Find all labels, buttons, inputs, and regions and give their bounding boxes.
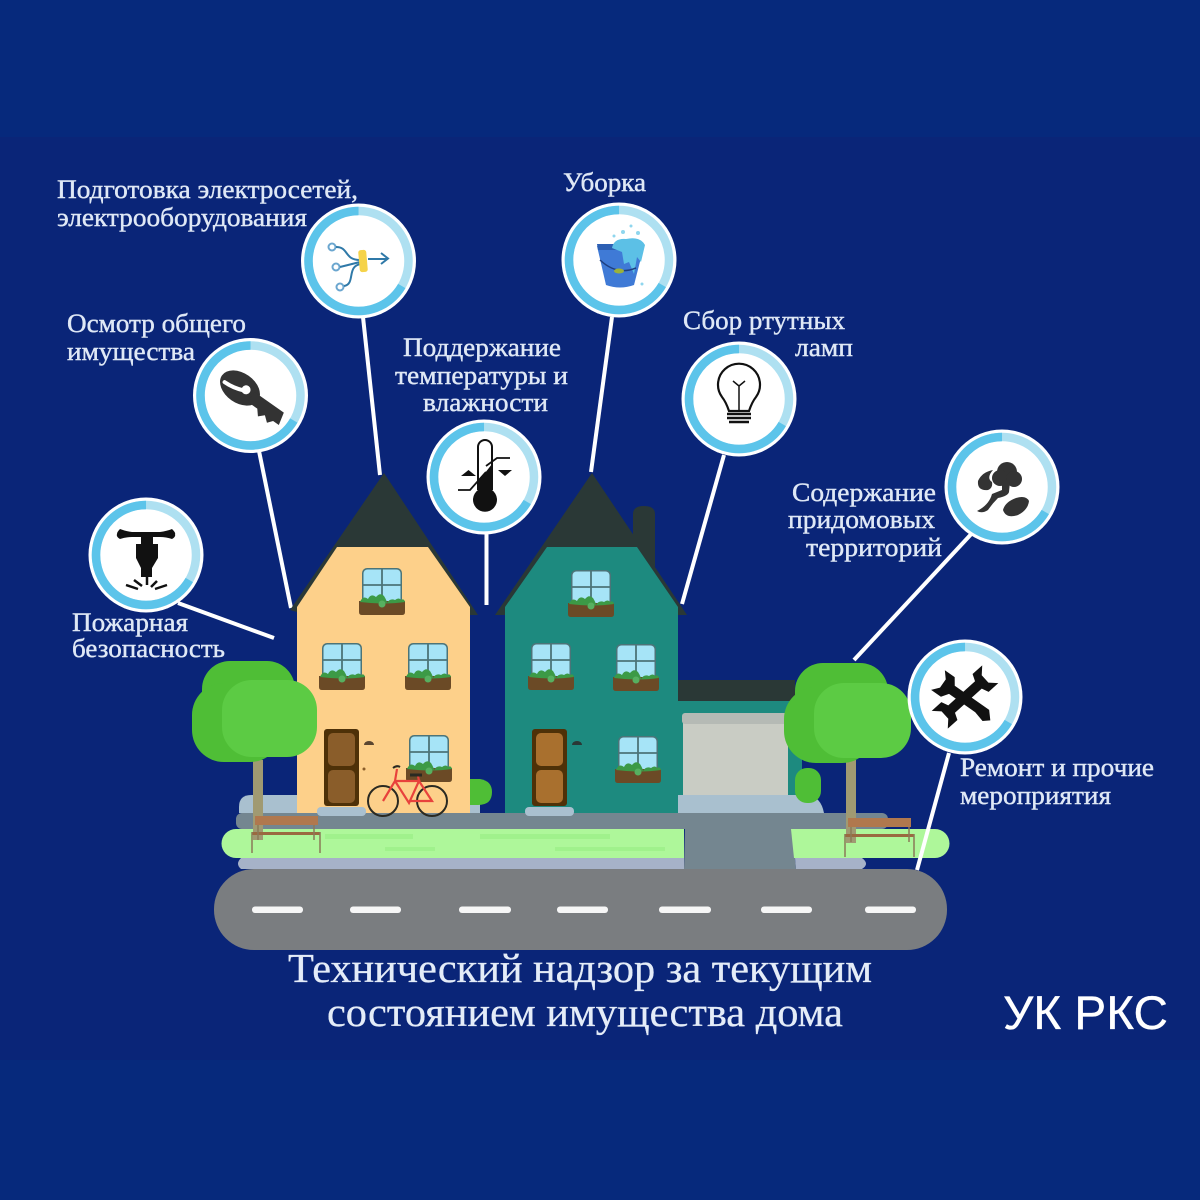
icon: circuit lines bbox=[328, 244, 388, 290]
label: temperature: Поддержание bbox=[403, 333, 561, 362]
sidewalk bbox=[236, 813, 888, 869]
label: inspection bbox=[67, 309, 246, 366]
label: repair bbox=[960, 753, 1154, 810]
step bbox=[525, 807, 574, 816]
label: lamps bbox=[683, 306, 853, 362]
label: electrical bbox=[57, 175, 358, 232]
label: temperature: температуры и bbox=[395, 361, 568, 390]
step bbox=[317, 807, 366, 816]
title bbox=[288, 945, 872, 1035]
building base plinths bbox=[239, 795, 824, 813]
bush left bbox=[470, 779, 492, 805]
windows bbox=[319, 568, 452, 782]
label: lamps: Сбор ртутных bbox=[683, 306, 845, 335]
lawn right bbox=[791, 829, 950, 858]
windows bbox=[528, 570, 661, 783]
door bbox=[324, 729, 374, 806]
roof bbox=[495, 473, 687, 615]
road dashes bbox=[252, 906, 916, 913]
label: electrical: электрооборудования bbox=[57, 203, 307, 232]
label: repair: Ремонт и прочие bbox=[960, 753, 1154, 782]
connector lines bbox=[178, 317, 975, 870]
curb bbox=[238, 858, 866, 869]
icon: thermometer bbox=[458, 440, 512, 512]
icon: bucket bbox=[597, 224, 645, 288]
chimney bbox=[633, 506, 655, 570]
node: electrical bbox=[290, 193, 427, 329]
label: temperature bbox=[395, 333, 568, 417]
label: cleaning: Уборка bbox=[563, 168, 646, 197]
road bbox=[214, 869, 947, 950]
lawn left bbox=[222, 829, 684, 858]
bush right bbox=[795, 768, 821, 803]
garage bbox=[678, 680, 802, 795]
title: Технический надзор за текущим bbox=[288, 945, 872, 991]
label: lamps: ламп bbox=[795, 333, 853, 362]
title: состоянием имущества дома bbox=[327, 989, 843, 1035]
house: green bbox=[495, 473, 687, 816]
icon: trees and bush bbox=[977, 462, 1029, 516]
label: fire safety bbox=[72, 608, 225, 663]
node: grounds bbox=[934, 419, 1070, 555]
bench right bbox=[845, 818, 914, 857]
label: temperature: влажности bbox=[423, 388, 548, 417]
bicycle bbox=[368, 766, 447, 816]
tree left bbox=[192, 661, 317, 840]
icon: sprinkler bbox=[117, 529, 175, 589]
brand mark: УК РКС bbox=[1003, 986, 1168, 1039]
label: grounds: придомовых bbox=[788, 505, 935, 534]
label: fire safety: Пожарная bbox=[72, 608, 188, 637]
node: lamp bbox=[671, 331, 807, 467]
icon: crossed wrenches bbox=[931, 665, 999, 729]
node: key bbox=[182, 327, 319, 464]
bench left bbox=[252, 816, 320, 853]
node: thermometer bbox=[416, 409, 552, 545]
label: inspection: имущества bbox=[67, 337, 195, 366]
lawn darker grass strokes bbox=[325, 834, 665, 851]
roof bbox=[290, 473, 478, 615]
label: fire safety: безопасность bbox=[72, 634, 225, 663]
house: yellow bbox=[290, 473, 478, 816]
node: sprinkler bbox=[78, 487, 214, 623]
icon: key bbox=[213, 363, 292, 431]
wall bbox=[505, 547, 678, 813]
tree right bbox=[784, 663, 911, 843]
node: repair bbox=[897, 629, 1033, 765]
wall bbox=[297, 547, 470, 813]
label: grounds bbox=[788, 478, 942, 562]
label: repair: мероприятия bbox=[960, 781, 1111, 810]
door bbox=[532, 729, 582, 806]
label: grounds: территорий bbox=[806, 533, 942, 562]
label: electrical: Подготовка электросетей, bbox=[57, 175, 358, 204]
icon: bulb bbox=[718, 364, 760, 422]
node: bucket bbox=[551, 192, 687, 328]
label: grounds: Содержание bbox=[792, 478, 936, 507]
label: inspection: Осмотр общего bbox=[67, 309, 246, 338]
